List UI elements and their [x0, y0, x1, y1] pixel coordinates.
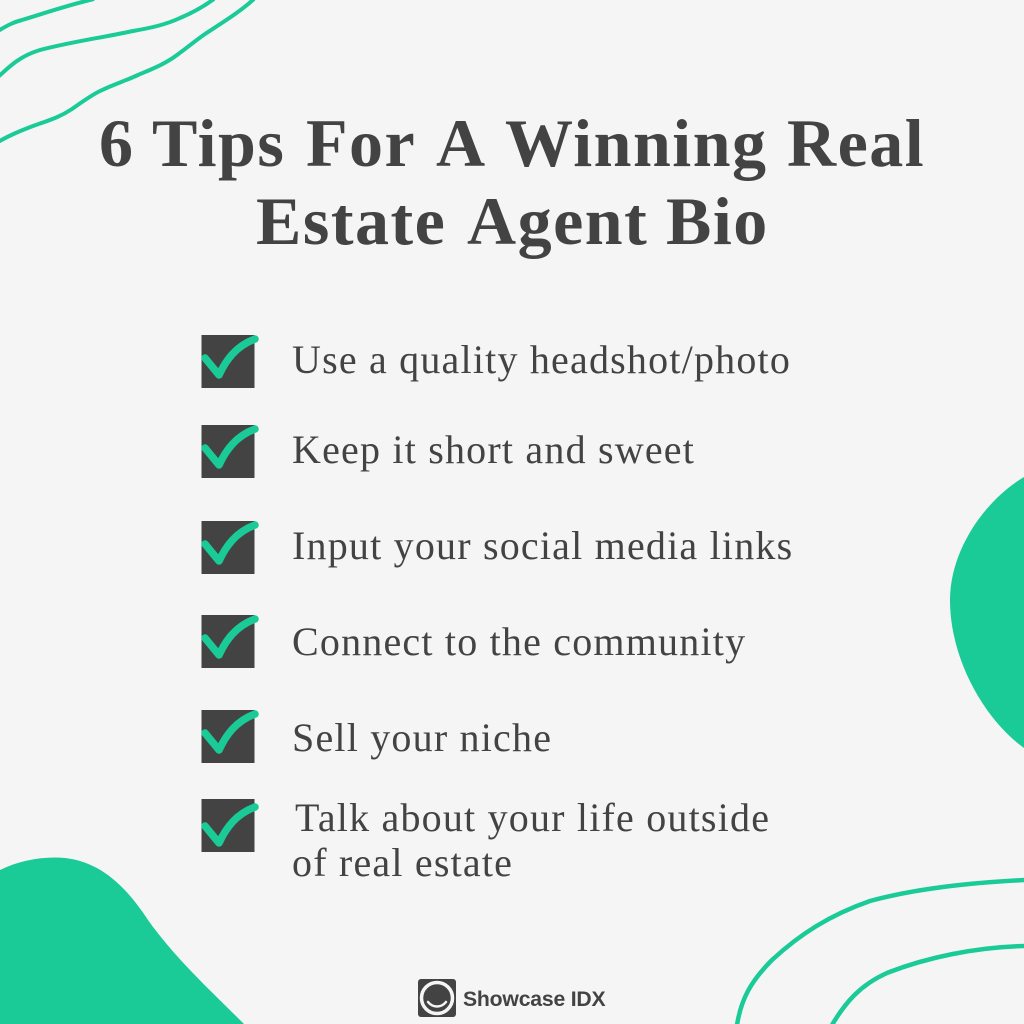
- tip 5: [202, 710, 552, 763]
- tip 6: [202, 795, 770, 885]
- tip 4: Connect to the community: [292, 619, 746, 664]
- title: Bio: [666, 183, 769, 259]
- title: Winning: [505, 105, 786, 181]
- title: Agent: [467, 183, 667, 259]
- title: A: [436, 105, 501, 181]
- logo wordmark: Showcase IDX: [463, 988, 606, 1011]
- icon: logo mark: [418, 979, 456, 1017]
- title: 6: [99, 105, 153, 181]
- tip 5: Sell your niche: [292, 715, 552, 760]
- title: For: [306, 105, 434, 181]
- logo: Showcase IDX: [418, 979, 606, 1017]
- tip 6: of real estate: [292, 840, 513, 885]
- tip 2: [202, 425, 695, 478]
- decoration: right green blob: [950, 477, 1024, 748]
- tip 3: Input your social media links: [292, 523, 793, 568]
- title: Estate: [256, 183, 465, 259]
- tip 2: Keep it short and sweet: [292, 427, 695, 472]
- title: [99, 105, 925, 259]
- decoration: bottom-left green blob: [0, 858, 244, 1024]
- tip 6: Talk about your life outside: [295, 795, 770, 840]
- title: Tips: [152, 105, 304, 181]
- title: Real: [787, 105, 925, 181]
- decoration: top-left curved lines: [0, 0, 254, 142]
- checklist: [202, 335, 793, 885]
- decoration: bottom-right curved lines: [737, 880, 1024, 1024]
- tip 1: Use a quality headshot/photo: [292, 337, 791, 382]
